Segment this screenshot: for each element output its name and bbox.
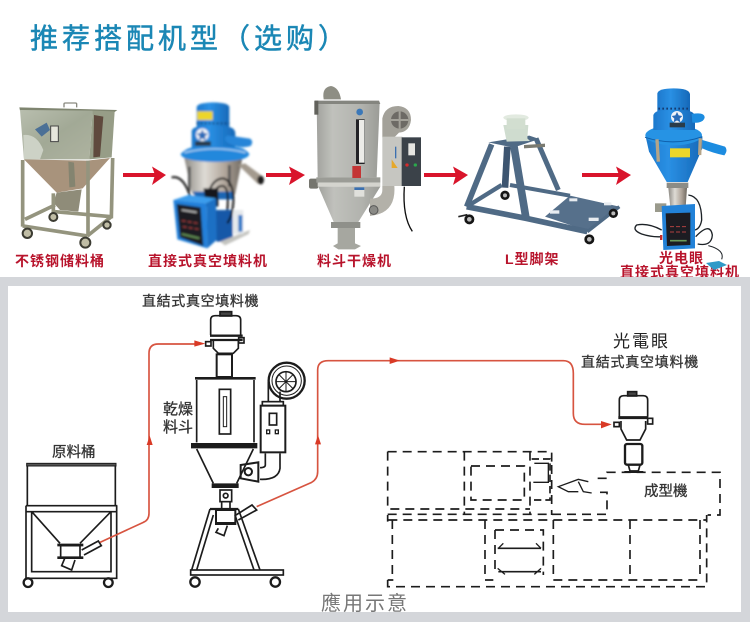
dashed injection molding machine — [388, 452, 720, 587]
photo: L-type stand — [458, 114, 619, 243]
label: photoelectric eye: 光電眼 — [613, 332, 670, 351]
diagram: application schematic — [24, 312, 720, 587]
label: top loader: 直結式真空填料機 — [142, 293, 259, 309]
label: hopper dryer: 料斗干燥机 — [317, 253, 392, 269]
diagram frame — [0, 277, 750, 622]
label: drying hopper line 1: 乾燥 — [163, 401, 193, 418]
dryer hopper with loader — [190, 312, 305, 587]
loader lid — [181, 147, 249, 162]
label: raw material bin: 原料桶 — [52, 444, 96, 461]
label: stainless bin: 不锈钢储料桶 — [15, 253, 105, 269]
label: photoelectric loader: 直接式真空填料机 — [620, 264, 740, 280]
label: molding machine: 成型機 — [644, 483, 688, 500]
arrow 4 — [582, 166, 631, 185]
loader upper section — [192, 102, 252, 149]
photo: stainless steel storage bin — [19, 103, 117, 248]
arrow 1 — [123, 166, 166, 185]
photo: photoelectric vacuum loader — [635, 88, 727, 259]
label: application diagram caption: 應用示意 — [321, 591, 409, 615]
photoelectric loader on molding machine — [614, 392, 653, 472]
red conveying line from dryer to molding loader — [257, 357, 612, 507]
product labels — [15, 250, 740, 280]
label: photoelectric eye: 光电眼 — [659, 250, 704, 266]
loader lower section — [172, 157, 264, 248]
arrow 3 — [424, 166, 468, 185]
arrow 2 — [266, 166, 305, 185]
title: 推荐搭配机型（选购） — [30, 23, 350, 54]
raw material bin — [24, 463, 117, 587]
pedal overlapping the frame — [706, 261, 727, 270]
label: drying hopper line 2: 料斗 — [163, 419, 193, 436]
label: photoelectric loader: 直結式真空填料機 — [581, 354, 699, 370]
label: L stand: L型脚架 — [505, 251, 560, 267]
photo: hopper dryer — [309, 86, 421, 249]
label: direct vacuum loader: 直接式真空填料机 — [148, 253, 268, 269]
red conveying line from bin to loader — [100, 340, 205, 542]
diagram labels — [52, 293, 699, 615]
photo: direct vacuum loader — [172, 102, 264, 248]
